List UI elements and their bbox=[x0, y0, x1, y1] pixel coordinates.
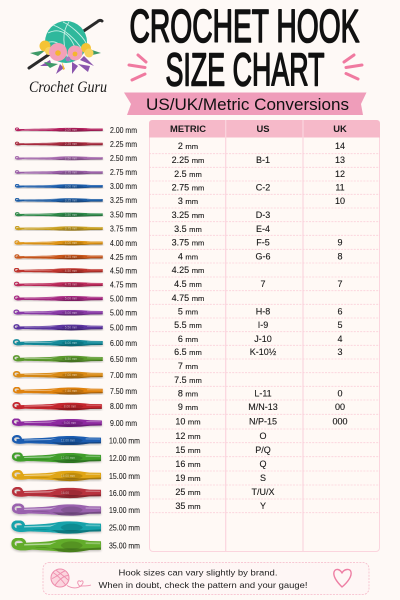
row 7.5 mm: 7.5 mm bbox=[174, 375, 202, 385]
icon: crochet hook bbox=[29, 20, 102, 68]
hook 4.25 mm bbox=[15, 252, 137, 262]
hook 7.00 mm: 7.00 mm bbox=[65, 373, 78, 377]
row 2 mm bbox=[178, 141, 345, 151]
row 15 mm: 15 mm bbox=[175, 445, 201, 455]
row 7 mm: 7 mm bbox=[178, 361, 198, 371]
hook 4.00 mm: 4.00 mm bbox=[110, 238, 137, 248]
hook 3.75 mm: 3.75 mm bbox=[110, 224, 137, 234]
hook 7.00 mm bbox=[14, 370, 137, 380]
row 2.25 mm: 13 bbox=[335, 155, 345, 165]
hook 4.50 mm bbox=[15, 266, 137, 276]
table header bbox=[149, 120, 380, 138]
row 2.25 mm: B-1 bbox=[256, 155, 270, 165]
hook 2.25 mm: 2.25 mm bbox=[110, 139, 137, 149]
subtitle ribbon bbox=[124, 92, 366, 115]
row 5 mm: H-8 bbox=[256, 306, 270, 316]
hook 2.25 mm bbox=[15, 139, 137, 149]
row 2.75 mm: C-2 bbox=[256, 182, 270, 192]
icon: flowers and leaves bbox=[30, 40, 101, 74]
table header: UK bbox=[333, 123, 347, 134]
row 3 mm bbox=[178, 196, 345, 206]
row 10 mm bbox=[175, 417, 348, 427]
row 5.5 mm: 5.5 mm bbox=[174, 320, 202, 330]
hook 2.50 mm: 2.50 mm bbox=[110, 153, 137, 163]
hook 15.00 mm: 15.00 mm bbox=[61, 474, 75, 478]
hook 3.25 mm: 3.25 mm bbox=[65, 198, 78, 202]
hook 2.50 mm bbox=[15, 153, 137, 163]
row 2 mm: 2 mm bbox=[178, 141, 198, 151]
row 15 mm bbox=[175, 445, 271, 455]
note text bbox=[98, 568, 308, 590]
hook 12.00 mm: 12.00 mm bbox=[61, 456, 75, 460]
row 3.75 mm: F-5 bbox=[256, 238, 270, 248]
hook 2.75 mm bbox=[15, 167, 137, 177]
row 25 mm: 25 mm bbox=[175, 487, 201, 497]
row 19 mm: S bbox=[260, 473, 266, 483]
hook 3.00 mm bbox=[15, 181, 137, 191]
row 3.5 mm: E-4 bbox=[256, 224, 270, 234]
row 5 mm: 5 mm bbox=[178, 306, 198, 316]
row 3.25 mm bbox=[172, 210, 270, 220]
row 4.5 mm bbox=[174, 279, 343, 289]
row 3.5 mm bbox=[174, 224, 270, 234]
hook 5.00 mm violet bbox=[14, 308, 137, 318]
hook 9.00 mm: 9.00 mm bbox=[110, 418, 137, 428]
icon: yarn ball bbox=[45, 21, 87, 63]
note text: When in doubt, check the pattern and your gauge! bbox=[98, 580, 308, 590]
hook 10.00 mm: 10.00 mm bbox=[109, 436, 140, 446]
row 19 mm: 19 mm bbox=[175, 473, 201, 483]
hook 25.00 mm: 25.00 mm bbox=[109, 522, 140, 532]
hook 2.00 mm: 2.00 mm bbox=[65, 128, 78, 132]
hook 5.00 mm magenta bbox=[15, 294, 137, 304]
hook 4.75 mm bbox=[15, 280, 137, 290]
table header: US bbox=[256, 123, 270, 134]
row 2.5 mm bbox=[174, 169, 345, 179]
hook 4.00 mm bbox=[15, 238, 137, 248]
hook 8.00 mm: 8.00 mm bbox=[110, 401, 137, 411]
row 6.5 mm bbox=[174, 347, 343, 357]
row 6 mm: J-10 bbox=[254, 334, 272, 344]
hook 5.00 mm indigo: 5.50 mm bbox=[65, 326, 78, 330]
panel: conversion table bbox=[149, 120, 380, 552]
icon: heart bbox=[334, 569, 351, 587]
hook 3.25 mm bbox=[15, 195, 137, 205]
row 3 mm: 3 mm bbox=[178, 196, 198, 206]
row 2 mm: 14 bbox=[335, 141, 345, 151]
hook 16.00 mm: 16.00 bbox=[61, 491, 69, 495]
row 35 mm bbox=[175, 501, 266, 511]
hook 2.75 mm: 2.75 mm bbox=[110, 167, 137, 177]
hook 2.00 mm bbox=[15, 125, 137, 135]
row 4.25 mm: 4.25 mm bbox=[172, 265, 204, 275]
row 35 mm: Y bbox=[260, 501, 266, 511]
hook 3.75 mm: 3.75 mm bbox=[65, 227, 78, 231]
row 2.25 mm: 2.25 mm bbox=[172, 155, 204, 165]
hook 6.00 mm bbox=[14, 338, 137, 348]
row 6 mm bbox=[178, 334, 343, 344]
hook 3.50 mm: 3.50 mm bbox=[65, 213, 78, 217]
hook 6.00 mm: 6.00 mm bbox=[65, 341, 78, 345]
row 4 mm: 8 bbox=[337, 251, 343, 261]
subtitle ribbon: US/UK/Metric Conversions bbox=[146, 96, 349, 114]
icon: right sunburst bbox=[344, 55, 362, 79]
hook 16.00 mm bbox=[13, 488, 140, 498]
hook 8.00 mm bbox=[13, 401, 137, 411]
hook 7.50 mm: 7.50 mm bbox=[110, 386, 137, 396]
row 4.5 mm: 7 bbox=[337, 279, 343, 289]
row 4.5 mm: 7 bbox=[260, 279, 266, 289]
logo: Crochet Guru bbox=[29, 20, 107, 96]
hook 7.50 mm bbox=[14, 386, 137, 396]
hook 4.25 mm: 4.25 mm bbox=[65, 255, 78, 259]
hook 4.75 mm: 4.75 mm bbox=[110, 280, 137, 290]
hook 2.00 mm: 2.00 mm bbox=[110, 125, 137, 135]
hook 5.00 mm magenta: 5.00 mm bbox=[65, 297, 78, 301]
row 6.5 mm: 6.5 mm bbox=[174, 347, 202, 357]
row 25 mm: T/U/X bbox=[251, 487, 275, 497]
hook 35.00 mm: 35.00 mm bbox=[109, 540, 140, 550]
hook 19.00 mm bbox=[13, 504, 140, 516]
row 4 mm: 4 mm bbox=[178, 251, 198, 261]
hook 12.00 mm: 12.00 mm bbox=[109, 453, 140, 463]
row 5.5 mm: I-9 bbox=[258, 320, 268, 330]
row 5.5 mm bbox=[174, 320, 343, 330]
row 6.5 mm: K-10½ bbox=[250, 347, 277, 357]
hook 7.50 mm: 7.50 mm bbox=[65, 389, 78, 393]
row 2.75 mm bbox=[172, 182, 345, 192]
row 2.75 mm: 11 bbox=[335, 182, 345, 192]
hook 2.50 mm: 2.50 mm bbox=[65, 156, 78, 160]
row 3.5 mm: 3.5 mm bbox=[174, 224, 202, 234]
row 6.5 mm: 3 bbox=[337, 347, 343, 357]
row 19 mm bbox=[175, 473, 266, 483]
row 2.25 mm bbox=[172, 155, 345, 165]
row 2.75 mm: 2.75 mm bbox=[172, 182, 204, 192]
logo wordmark: Crochet Guru bbox=[29, 79, 107, 96]
row 8 mm: 8 mm bbox=[178, 388, 198, 398]
row 6 mm: 4 bbox=[337, 334, 343, 344]
hook 25.00 mm bbox=[13, 521, 140, 534]
hook 5.00 mm violet: 5.00 mm bbox=[110, 308, 137, 318]
row 8 mm bbox=[178, 388, 343, 398]
row 10 mm: 10 mm bbox=[175, 417, 201, 427]
row 9 mm: M/N-13 bbox=[248, 402, 278, 412]
hook 2.75 mm: 2.75 mm bbox=[65, 171, 78, 175]
row 9 mm: 00 bbox=[335, 402, 345, 412]
row 4.5 mm: 4.5 mm bbox=[174, 279, 202, 289]
hook illustrations with size labels bbox=[13, 125, 140, 552]
title bbox=[130, 0, 360, 96]
hook 16.00 mm: 16.00 mm bbox=[109, 488, 140, 498]
hook 19.00 mm: 19.00 mm bbox=[109, 505, 140, 515]
row 25 mm bbox=[175, 487, 275, 497]
hook 9.00 mm bbox=[13, 418, 137, 428]
hook 9.00 mm: 9.00 mm bbox=[64, 421, 77, 425]
row 10 mm: 000 bbox=[332, 417, 348, 427]
callout: footer note bbox=[43, 562, 369, 594]
hook 4.75 mm: 4.75 mm bbox=[65, 283, 78, 287]
row 9 mm bbox=[178, 402, 345, 412]
hook 5.00 mm indigo bbox=[14, 322, 137, 332]
hook 3.00 mm: 3.00 mm bbox=[65, 184, 78, 188]
row 16 mm: Q bbox=[259, 459, 267, 469]
row 5.5 mm: 5 bbox=[337, 320, 343, 330]
row 8 mm: 0 bbox=[337, 388, 343, 398]
row 3.75 mm: 3.75 mm bbox=[172, 238, 204, 248]
hook 2.25 mm: 2.25 mm bbox=[65, 142, 78, 146]
hook 3.75 mm bbox=[15, 224, 137, 234]
row 35 mm: 35 mm bbox=[175, 501, 201, 511]
hook 10.00 mm bbox=[13, 436, 140, 446]
row 4.75 mm: 4.75 mm bbox=[172, 293, 204, 303]
row 3.75 mm: 9 bbox=[337, 238, 343, 248]
row 16 mm: 16 mm bbox=[175, 459, 201, 469]
icon: left sunburst bbox=[129, 55, 146, 80]
row 4 mm bbox=[178, 251, 343, 261]
hook 4.50 mm: 4.50 mm bbox=[110, 266, 137, 276]
row 10 mm: N/P-15 bbox=[249, 417, 277, 427]
row 5 mm bbox=[178, 306, 343, 316]
row 12 mm: O bbox=[259, 431, 267, 441]
hook 4.50 mm: 4.50 mm bbox=[65, 269, 78, 273]
row 8 mm: L-11 bbox=[254, 388, 272, 398]
hook 3.00 mm: 3.00 mm bbox=[110, 181, 137, 191]
hook 3.50 mm bbox=[15, 210, 137, 220]
note text: Hook sizes can vary slightly by brand. bbox=[118, 568, 278, 578]
hook 4.00 mm: 4.00 mm bbox=[65, 241, 78, 245]
hook 5.00 mm magenta: 5.00 mm bbox=[110, 294, 137, 304]
row 12 mm bbox=[175, 431, 267, 441]
hook 3.50 mm: 3.50 mm bbox=[110, 210, 137, 220]
row 5 mm: 6 bbox=[337, 306, 343, 316]
hook 3.25 mm: 3.25 mm bbox=[110, 195, 137, 205]
hook 35.00 mm bbox=[13, 539, 140, 552]
hook 4.25 mm: 4.25 mm bbox=[110, 252, 137, 262]
row 16 mm bbox=[175, 459, 267, 469]
row 12 mm: 12 mm bbox=[175, 431, 201, 441]
hook 5.00 mm indigo: 5.00 mm bbox=[110, 322, 137, 332]
hook 10.00 mm: 12.00 mm bbox=[61, 439, 75, 443]
row 2.5 mm: 2.5 mm bbox=[174, 169, 202, 179]
row 3.25 mm: 3.25 mm bbox=[172, 210, 204, 220]
row 3.75 mm bbox=[172, 238, 343, 248]
hook 12.00 mm bbox=[13, 453, 140, 463]
hook 5.00 mm violet: 5.00 mm bbox=[65, 311, 78, 315]
row 15 mm: P/Q bbox=[255, 445, 271, 455]
row 2.5 mm: 12 bbox=[335, 169, 345, 179]
hook 15.00 mm bbox=[13, 471, 140, 481]
table frame bbox=[150, 120, 380, 552]
hook 6.50 mm: 6.50 mm bbox=[110, 354, 137, 364]
row 6 mm: 6 mm bbox=[178, 334, 198, 344]
row 3.25 mm: D-3 bbox=[256, 210, 270, 220]
hook 8.00 mm: 8.00 mm bbox=[64, 405, 77, 409]
table header: METRIC bbox=[170, 123, 206, 134]
hook 6.50 mm: 6.50 mm bbox=[65, 357, 78, 361]
hook 15.00 mm: 15.00 mm bbox=[109, 471, 140, 481]
row 3 mm: 10 bbox=[335, 196, 345, 206]
icon: yarn ball with heart bbox=[51, 569, 91, 588]
row 9 mm: 9 mm bbox=[178, 402, 198, 412]
hook 6.50 mm bbox=[14, 354, 137, 364]
hook 7.00 mm: 7.00 mm bbox=[110, 370, 137, 380]
hook 6.00 mm: 6.00 mm bbox=[110, 338, 137, 348]
row 4 mm: G-6 bbox=[255, 251, 271, 261]
